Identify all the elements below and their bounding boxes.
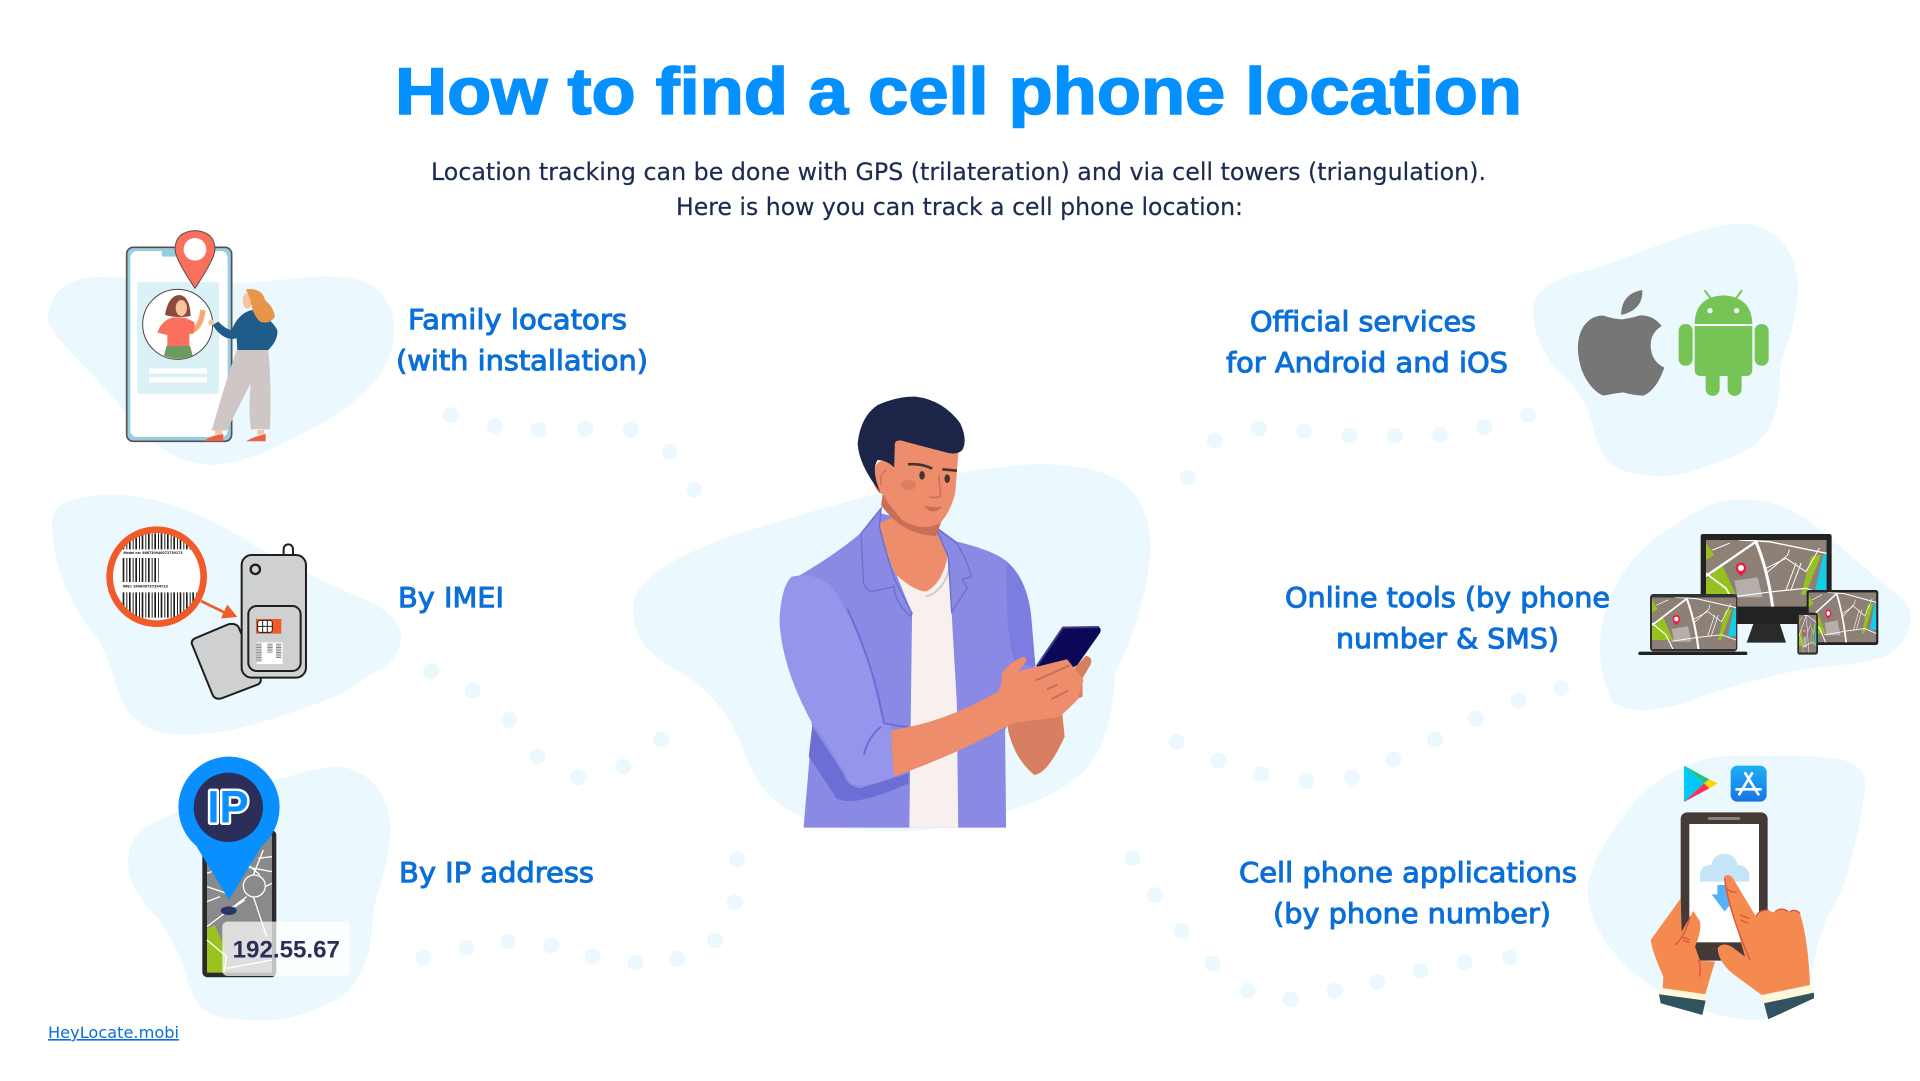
download arrow: [1712, 885, 1738, 912]
phone map: [207, 834, 272, 973]
panel: by IMEI: [52, 495, 504, 734]
icon: IP pin on phone map: [178, 757, 350, 977]
woman pants: [212, 348, 271, 431]
link: HeyLocate.mobi: HeyLocate.mobi: [48, 1023, 179, 1042]
blob background: [128, 767, 390, 1020]
heading: By IP address: [399, 856, 594, 889]
lens ring: [110, 530, 204, 624]
girl hair: [165, 295, 191, 317]
laptop screen: [1652, 597, 1736, 649]
google play logo: [1684, 766, 1718, 802]
heading: Online tools (by phone: [1285, 581, 1610, 614]
lower jacket shadow: [809, 727, 909, 801]
card text lines: [149, 368, 207, 382]
pin inner circle: [194, 773, 263, 842]
blob background: [1600, 499, 1911, 710]
rolled sleeve: [779, 575, 894, 786]
finger lines: [1675, 878, 1800, 977]
subtitle text: Here is how you can track a cell phone location:: [676, 193, 1243, 221]
heading: By IMEI: [398, 581, 504, 614]
small phone frame: [1797, 613, 1818, 655]
woman hair: [246, 289, 275, 323]
laptop base: [1638, 652, 1747, 655]
phone body: [202, 830, 276, 977]
heading: (with installation): [396, 344, 648, 377]
address text: 192.55.67: [233, 936, 340, 963]
avatar circle: [143, 289, 213, 359]
panel: by IP address: [128, 757, 594, 1020]
heading: Family locators: [408, 303, 627, 336]
heading: [1285, 581, 1610, 655]
blob background: [52, 495, 401, 734]
small phone screen: [1799, 615, 1816, 653]
ear: [873, 461, 892, 494]
icon: IMEI magnifier and phone: [109, 529, 306, 699]
battery cover: [192, 624, 261, 699]
woman shoes: [203, 434, 266, 441]
woman ankles: [215, 430, 264, 435]
monitor screen: [1706, 540, 1827, 607]
android logo: [1679, 290, 1769, 396]
phone screen: [130, 251, 228, 437]
blob background: [48, 277, 394, 465]
heading: for Android and iOS: [1226, 346, 1508, 379]
panel: cell phone applications: [1239, 755, 1865, 1020]
laptop frame: [1650, 594, 1737, 651]
illustration: man holding a phone: [779, 397, 1101, 828]
monitor frame: [1701, 534, 1832, 624]
back forearm: [1007, 710, 1065, 775]
girl raised arm: [193, 310, 203, 330]
notch: [162, 250, 195, 257]
right jacket side shade: [1006, 562, 1035, 667]
heading: Cell phone applications: [1239, 856, 1577, 889]
ear detail: [881, 471, 886, 485]
title: How to find a cell phone location: [395, 54, 1522, 128]
left cuff: [1659, 988, 1706, 1001]
right hand: [1718, 875, 1810, 995]
panel: online tools: [1285, 499, 1911, 710]
blob background: [1588, 755, 1865, 1020]
tablet screen: [1809, 592, 1876, 642]
SIM chip: [258, 620, 272, 632]
phone back: [242, 555, 306, 678]
girl shirt: [157, 317, 195, 346]
woman sweater: [213, 310, 277, 350]
heading: Official services: [1250, 305, 1476, 338]
heading: number & SMS): [1336, 622, 1559, 655]
subtitle text: Location tracking can be done with GPS (trilateration) and via cell towers (triangulation).: [431, 158, 1486, 186]
profile card: [137, 282, 219, 394]
lens label IMEI: IMEI: 340800737394723: [123, 584, 169, 588]
necklace: [926, 570, 949, 597]
eyes: [919, 471, 950, 483]
park: [207, 925, 227, 973]
nose: [929, 475, 941, 498]
android eyes: [1707, 308, 1739, 313]
battery label: [257, 642, 283, 664]
apple logo: [1578, 290, 1664, 396]
jaw shadow: [881, 493, 941, 536]
left sleeve: [1659, 994, 1706, 1015]
finger lines: [1035, 665, 1070, 699]
phone edge: [1037, 627, 1099, 665]
icon: Apple and Android logos: [1578, 290, 1769, 396]
heading: [1239, 856, 1577, 930]
IP letters: IP: [207, 782, 249, 833]
face: [878, 437, 959, 527]
hair: [858, 397, 965, 492]
phone body: [127, 247, 232, 441]
heading: (by phone number): [1273, 897, 1551, 930]
woman face: [243, 293, 252, 309]
barcodes: [123, 541, 197, 605]
panel: family locators: [48, 231, 648, 465]
white t-shirt: [893, 552, 958, 828]
blob background: [1533, 224, 1798, 476]
forearm and hand: [891, 657, 1084, 777]
heading: [396, 303, 648, 377]
lens fill: [109, 529, 204, 624]
right sleeve: [1764, 993, 1814, 1019]
SIM card: [256, 619, 281, 634]
address tag: [222, 922, 350, 976]
fingers behind phone: [1064, 656, 1091, 702]
heading: [1226, 305, 1508, 379]
icon: responsive devices with map: [1638, 534, 1878, 655]
icon: phone with person and map pin: [127, 231, 277, 441]
SIM chip contacts: [258, 620, 272, 632]
monitor stand: [1747, 624, 1786, 643]
camera: [251, 565, 260, 574]
pin shadow: [221, 906, 237, 915]
right cuff: [1762, 986, 1814, 1003]
right collar: [935, 527, 971, 612]
girl pants: [164, 346, 193, 359]
woman hand: [208, 320, 214, 326]
app store logo: [1731, 766, 1767, 802]
speaker: [1708, 817, 1740, 820]
pin body: [178, 757, 280, 900]
icon: hands holding phone with app stores: [1651, 766, 1814, 1019]
arrow: [201, 601, 237, 618]
phone body: [1681, 812, 1768, 961]
jacket body: [792, 513, 1035, 828]
lens label model: Model no: 866730946072739173: [123, 551, 183, 555]
map pin: [175, 231, 215, 288]
left collar: [861, 508, 912, 616]
left hand: [1651, 898, 1715, 995]
cloud icon: [1700, 854, 1749, 882]
phone screen: [1689, 824, 1759, 942]
neck and chest: [879, 510, 948, 592]
background blob behind central figure: [633, 464, 1150, 831]
cheek: [901, 480, 916, 490]
brows: [908, 464, 957, 471]
phone loop: [284, 544, 293, 558]
girl face: [176, 300, 187, 316]
roads: [207, 850, 272, 972]
subtitle text: [431, 158, 1486, 221]
pin hole: [184, 238, 206, 261]
sleeve fold lines: [847, 609, 908, 755]
battery bay: [248, 606, 301, 671]
phone: [1036, 627, 1101, 680]
panel: official services: [1226, 224, 1798, 476]
label bars: [259, 644, 279, 662]
mouth: [922, 505, 942, 511]
tablet frame: [1807, 590, 1878, 645]
dotted connector paths: [416, 407, 1569, 1007]
